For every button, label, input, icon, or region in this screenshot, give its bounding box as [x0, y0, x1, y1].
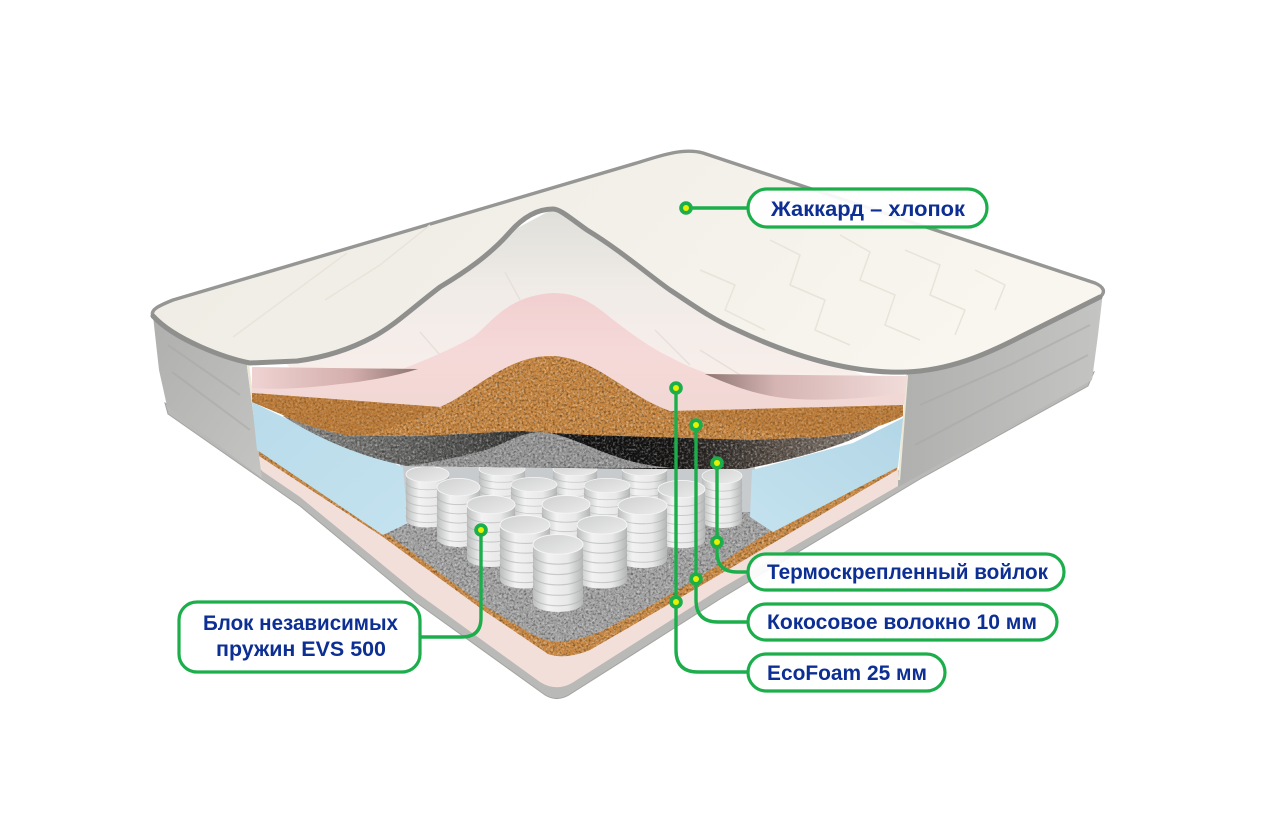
callout: Кокосовое волокно 10 мм	[689, 418, 1057, 640]
callout: Блок независимых пружин EVS 500: Блок независимых	[203, 612, 398, 635]
pink foam shaded left	[252, 367, 418, 389]
mattress illustration	[152, 151, 1103, 699]
quilting stitches	[233, 225, 1005, 345]
spring block	[406, 462, 742, 612]
bottom coconut layer	[258, 446, 897, 656]
callout: Жаккард – хлопок: Жаккард – хлопок	[770, 198, 965, 221]
pink foam shaded right	[705, 374, 906, 400]
left blue foam	[252, 402, 408, 535]
callout: Термоскрепленный войлок: Термоскрепленный войлок	[767, 561, 1048, 584]
back wall behind springs	[400, 462, 755, 528]
right side panel	[898, 292, 1103, 487]
side panel cut edges	[248, 365, 907, 480]
callout: Жаккард – хлопок	[679, 189, 987, 227]
right blue foam	[750, 418, 903, 532]
bottom felt layer	[385, 512, 772, 642]
callout: Блок независимых пружин EVS 500	[179, 523, 488, 672]
coconut back shading right	[672, 405, 903, 436]
top cover	[152, 151, 1103, 372]
dark underside of upper felt	[283, 400, 887, 469]
callout: Термоскрепленный войлок	[710, 456, 1064, 590]
pink foam layer	[252, 293, 907, 414]
callout: EcoFoam 25 мм	[669, 381, 945, 691]
coconut layer	[252, 356, 903, 440]
left side panel	[153, 316, 262, 478]
callout: Блок независимых пружин EVS 500: пружин EVS 500	[216, 638, 386, 661]
coconut back shading left	[252, 393, 440, 436]
callout: EcoFoam 25 мм: EcoFoam 25 мм	[767, 662, 927, 685]
quilted underside of top layer	[285, 209, 870, 380]
base edge bead	[165, 372, 1094, 699]
quilt tufts	[420, 272, 745, 378]
callout: Кокосовое волокно 10 мм: Кокосовое волокно 10 мм	[767, 611, 1037, 634]
side panel quilting	[168, 325, 1090, 445]
upper felt layer	[405, 432, 672, 468]
front rim	[153, 209, 1100, 372]
bottom foam layer	[258, 445, 898, 687]
